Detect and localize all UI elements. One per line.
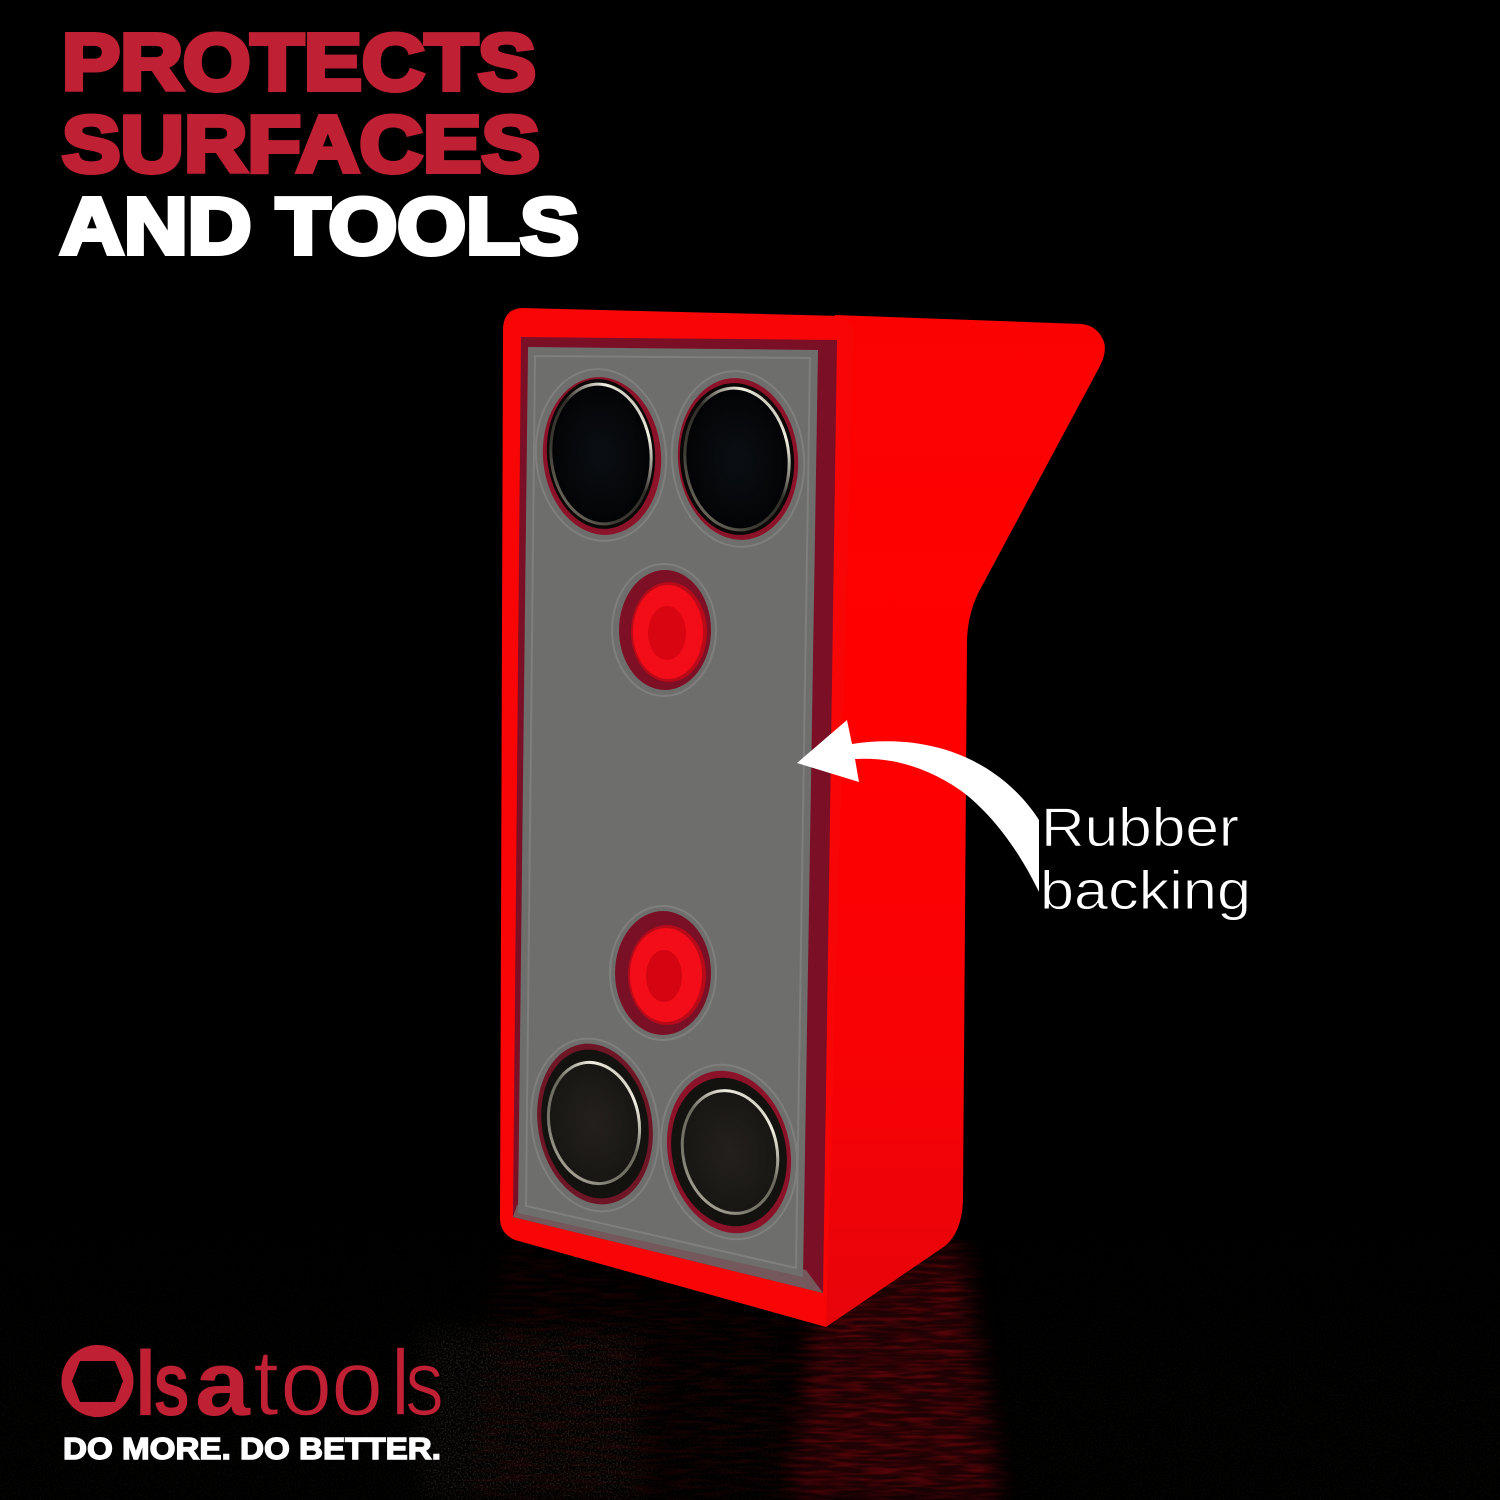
logo wordmark bold [135, 1333, 251, 1435]
title line: protects: PROTECTS [62, 18, 536, 106]
magnet top left [529, 364, 673, 546]
tagline: DO MORE. DO BETTER. [63, 1431, 441, 1466]
floor texture and red reflection [0, 1240, 1500, 1500]
title line: and tools: AND TOOLS [60, 182, 579, 270]
magnet top right [665, 366, 811, 552]
title [60, 18, 579, 270]
logo wordmark light: tool [253, 1330, 411, 1435]
logo: Olsatools [62, 1330, 444, 1466]
product: red magnetic holder [500, 308, 1105, 1327]
recess [513, 337, 837, 1293]
arrow: curved pointer to rubber backing [797, 720, 1039, 892]
rubber backing panel [518, 347, 818, 1277]
holder front rim [500, 308, 854, 1327]
logo wordmark bold: l [135, 1333, 156, 1435]
magnet bottom left [518, 1028, 672, 1222]
logo wordmark light: s [405, 1330, 444, 1435]
callout: rubber backing [1040, 796, 1251, 921]
logo wordmark bold: s [153, 1333, 190, 1435]
screw post bottom [610, 906, 716, 1040]
title line: surfaces: SURFACES [62, 100, 540, 188]
callout line 1: Rubber [1041, 796, 1239, 858]
screw post top [612, 564, 716, 696]
logo icon: hex O [62, 1345, 134, 1417]
logo wordmark bold: a [195, 1333, 251, 1435]
callout line 2: backing [1040, 859, 1251, 921]
magnet bottom right [645, 1052, 813, 1252]
recess lower translucent band [513, 1205, 823, 1293]
holder side body [800, 315, 1105, 1327]
